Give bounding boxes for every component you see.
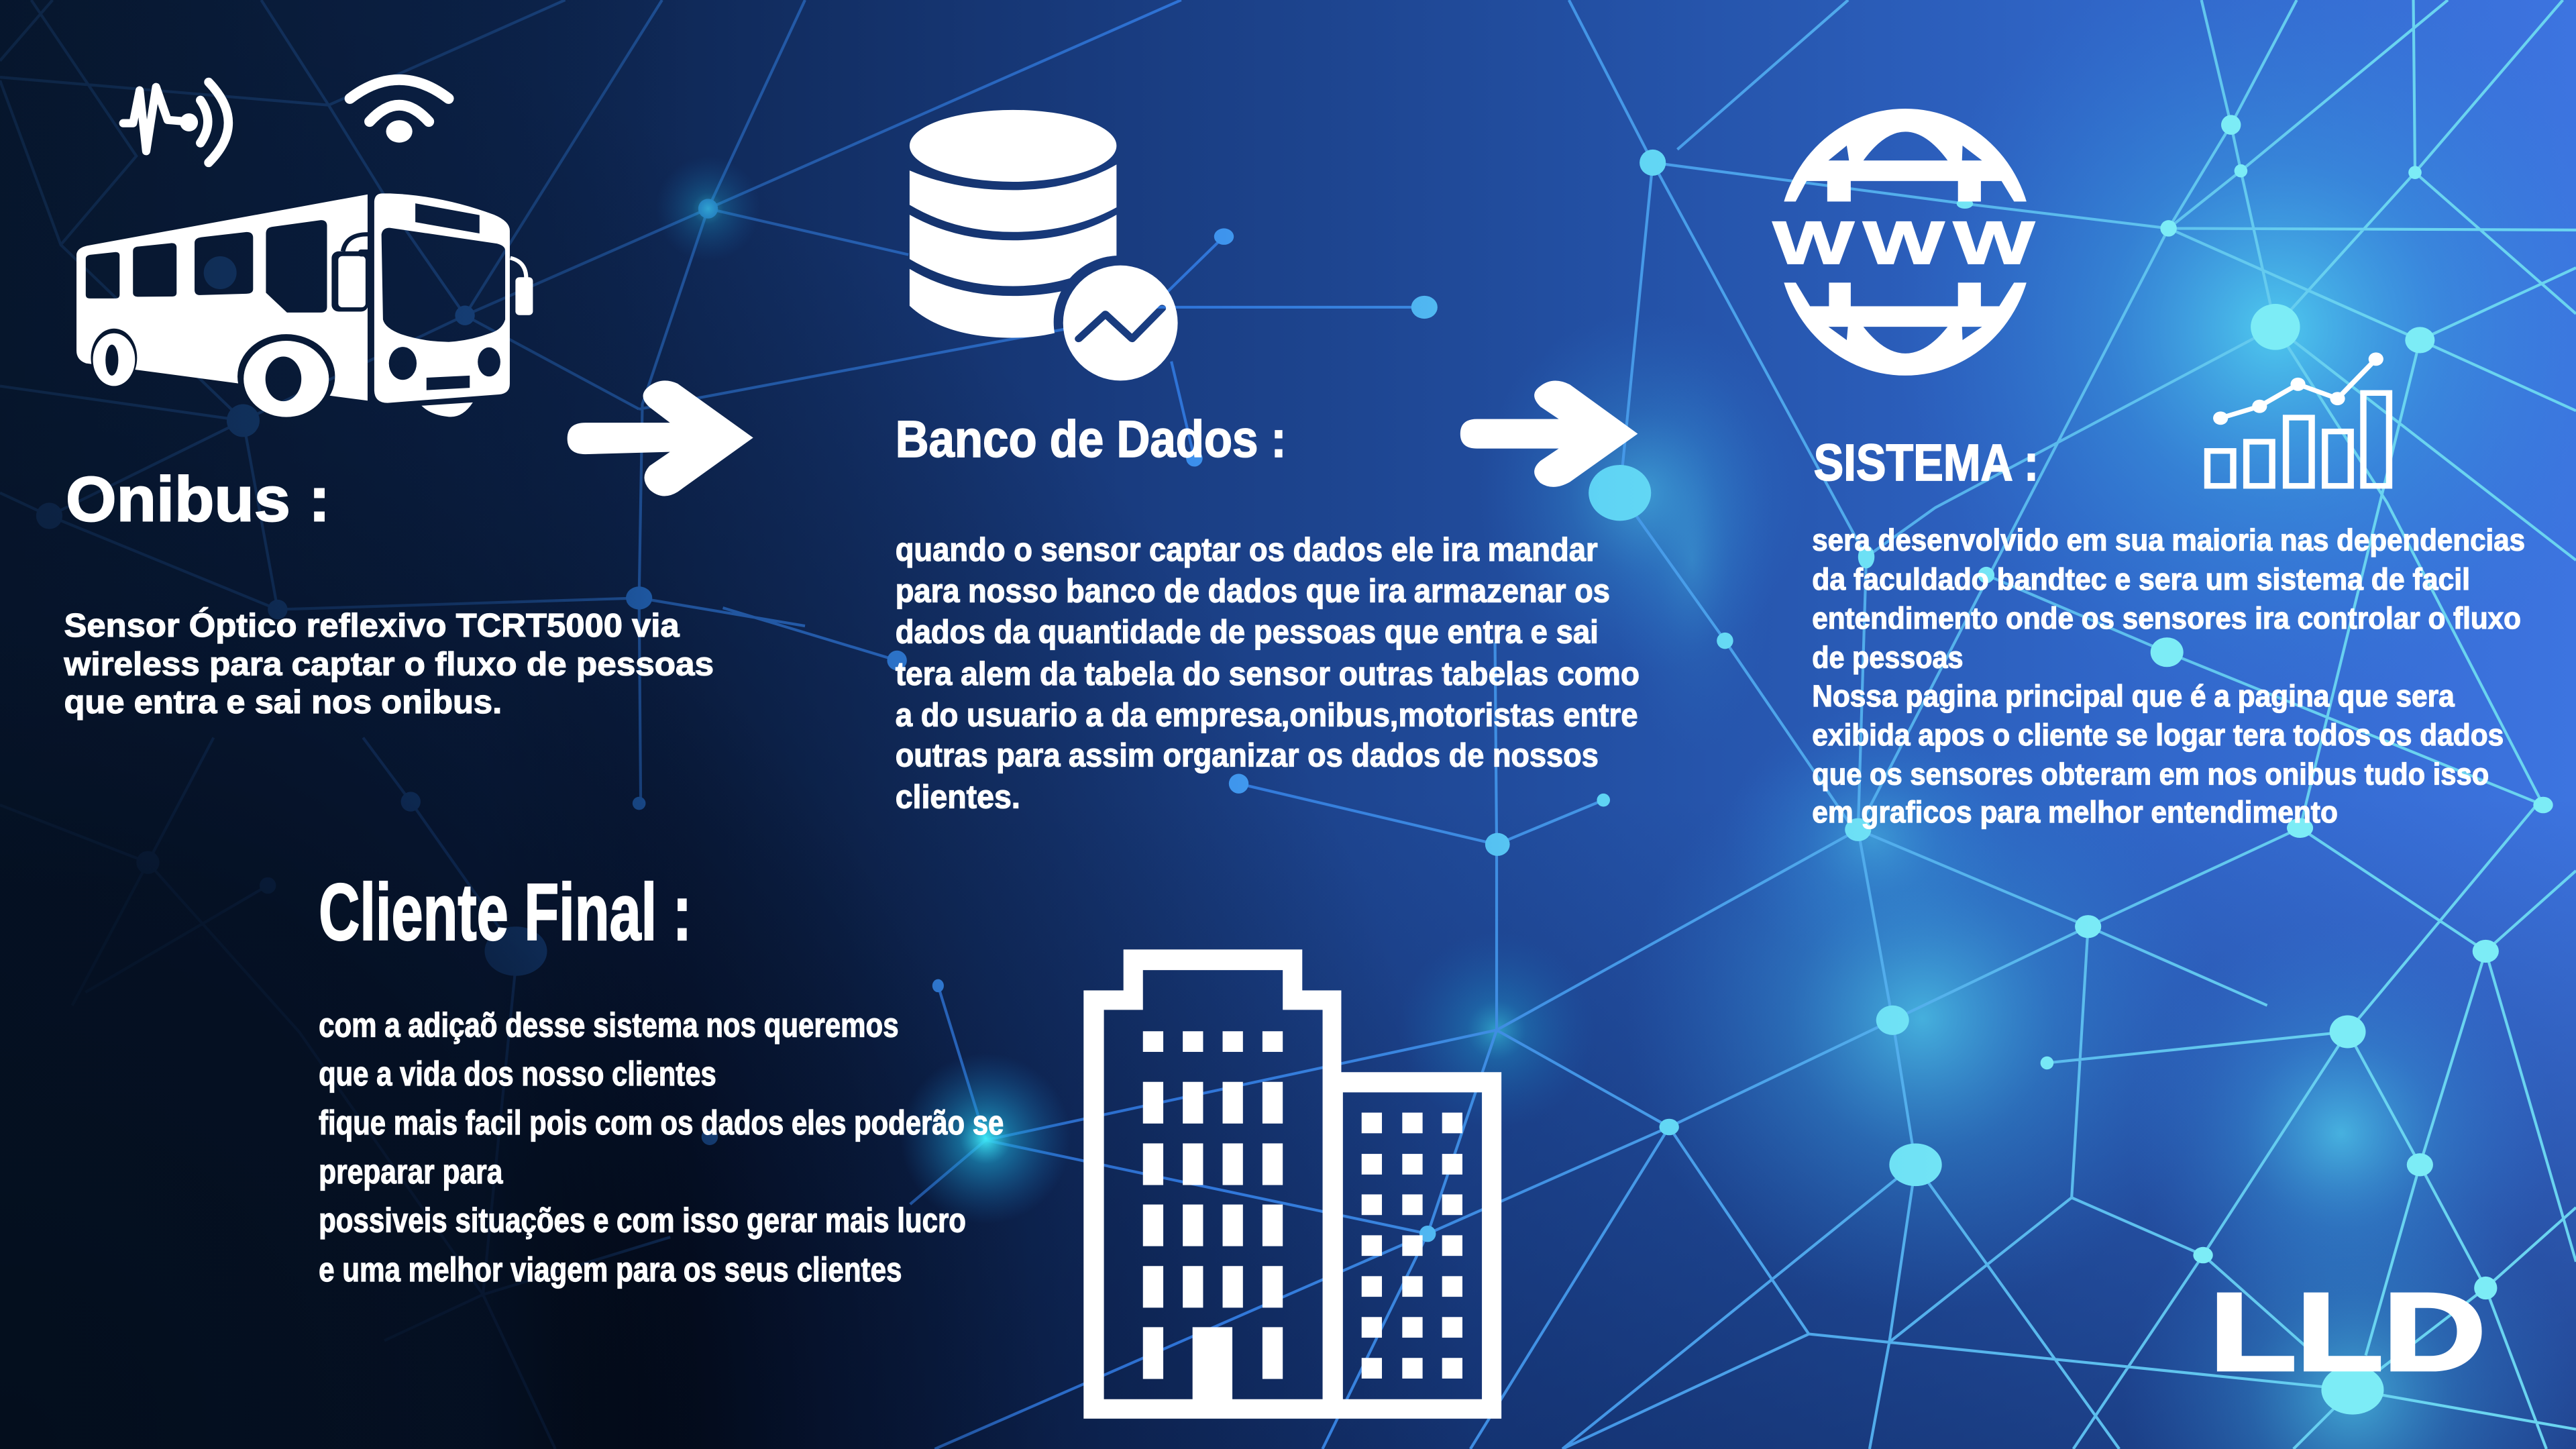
panel: Banco de Dados	[861, 67, 1640, 815]
text: Cliente Final description: fique mais facil pois com os dados eles poderão se	[319, 1103, 1004, 1142]
panel: Sistema	[1734, 67, 2525, 829]
heading: Banco de Dados: Banco de Dados :	[896, 411, 1287, 468]
text: Banco de Dados description: clientes.	[896, 779, 1020, 815]
text: Onibus description: que entra e sai nos onibus.	[64, 684, 502, 720]
text: Cliente Final description	[319, 1005, 1004, 1289]
icon: www globe	[1734, 67, 2136, 427]
icon: bar and line chart	[2208, 352, 2389, 486]
text: Sistema description: da faculdado bandtec e sera um sistema de facil	[1812, 562, 2470, 596]
text: Sistema description: sera desenvolvido em sua maioria nas dependencias	[1812, 523, 2525, 557]
heading: Sistema: SISTEMA :	[1814, 434, 2039, 492]
text: Sistema description: Nossa pagina principal que é a pagina que sera	[1812, 679, 2455, 713]
text: Sistema description: que os sensores obteram em nos onibus tudo isso	[1812, 757, 2489, 792]
text: Banco de Dados description: para nosso banco de dados que ira armazenar os	[896, 574, 1610, 610]
icon: www globe: WWW	[1772, 209, 2035, 277]
text: Sistema description: de pessoas	[1812, 640, 1964, 674]
icon: database with chart badge	[910, 110, 1178, 381]
heading: Onibus: Onibus :	[66, 464, 330, 534]
text: Banco de Dados description: outras para assim organizar os dados de nossos	[896, 737, 1599, 773]
text: Onibus description	[63, 607, 714, 720]
text: Banco de Dados description: a do usuario a da empresa,onibus,motoristas entre	[896, 697, 1638, 733]
text: Banco de Dados description: quando o sensor captar os dados ele ira mandar	[896, 532, 1598, 568]
text: Cliente Final description: com a adiçaõ desse sistema nos queremos	[319, 1005, 899, 1044]
icon: office buildings	[1083, 949, 1501, 1419]
text: Banco de Dados description: dados da quantidade de pessoas que entra e sai	[896, 614, 1599, 651]
text: Sistema description	[1812, 523, 2525, 829]
panel: Onibus	[0, 80, 753, 720]
text: Banco de Dados description: tera alem da tabela do sensor outras tabelas como	[896, 656, 1640, 692]
text: Sistema description: exibida apos o cliente se logar tera todos os dados	[1812, 718, 2504, 752]
icon: bus	[76, 193, 533, 417]
text: Cliente Final description: que a vida dos nosso clientes	[319, 1054, 716, 1093]
text: Sistema description: entendimento onde os sensores ira controlar o fluxo	[1812, 601, 2521, 635]
icon: wifi	[350, 80, 449, 143]
text: Onibus description: Sensor Óptico reflexivo TCRT5000 via	[64, 607, 680, 644]
text: Sistema description: em graficos para melhor entendimento	[1812, 795, 2338, 829]
icon: sensor pulse	[123, 82, 228, 162]
text: Cliente Final description: possiveis situações e com isso gerar mais lucro	[319, 1201, 966, 1240]
text: Onibus description: wireless para captar o fluxo de pessoas	[63, 647, 714, 683]
arrow: onibus to banco de dados	[568, 380, 753, 496]
text: Cliente Final description: preparar para	[319, 1152, 503, 1191]
text: Cliente Final description: e uma melhor viagem para os seus clientes	[319, 1250, 902, 1289]
text: Banco de Dados description	[896, 532, 1640, 815]
heading: Cliente Final: Cliente Final :	[319, 867, 692, 957]
arrow: banco de dados to sistema	[1460, 381, 1638, 487]
panel: Cliente Final	[319, 867, 1501, 1419]
logo: LLD: LLD	[2210, 1270, 2485, 1393]
